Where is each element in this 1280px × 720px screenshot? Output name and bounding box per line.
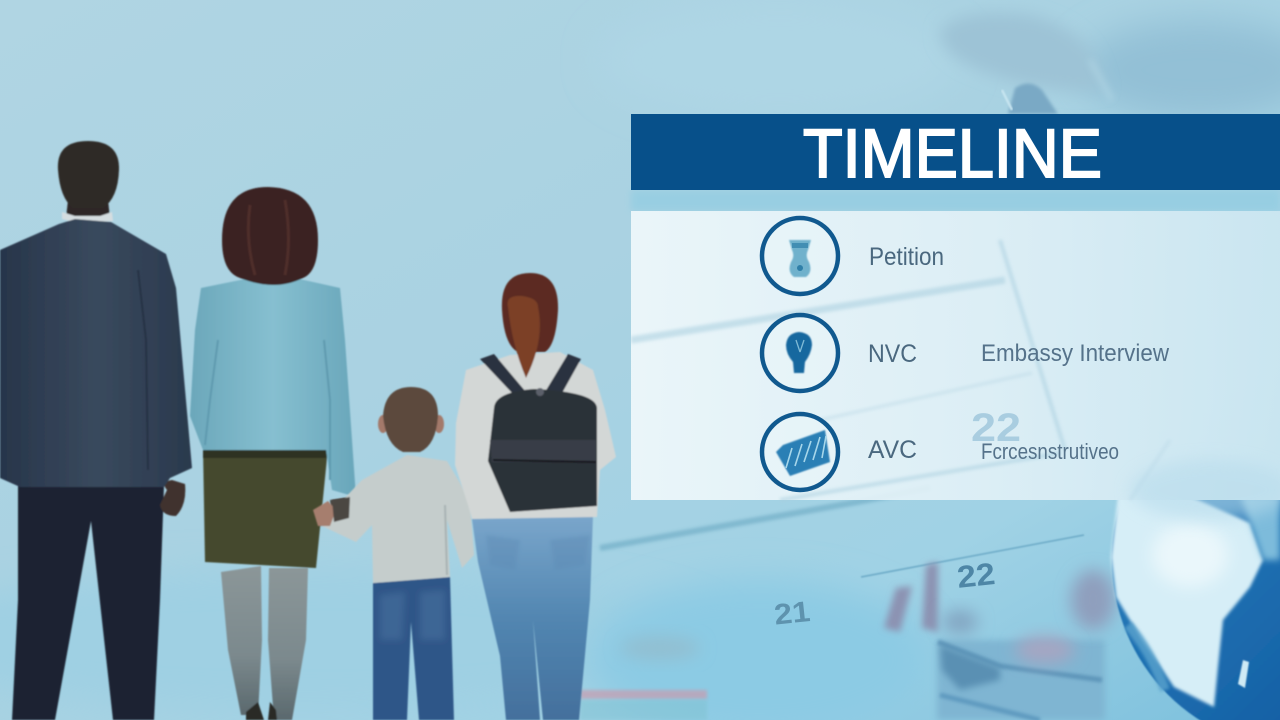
step: Petition (762, 218, 944, 294)
label: AVC: AVC (868, 436, 917, 464)
label: Embassy Interview: Embassy Interview (981, 340, 1170, 367)
calendar ghost lines (631, 240, 1170, 500)
top-right blurred clouds (940, 13, 1280, 120)
icon: emblem (762, 218, 838, 294)
icon: ticket (762, 414, 838, 490)
label: Petition: Petition (869, 243, 944, 271)
date 21: 21 (773, 596, 812, 632)
label: garbled text: Fcrcesnstrutiveo (981, 439, 1119, 464)
label: NVC: NVC (868, 340, 917, 368)
icon: balloon (762, 315, 838, 391)
figure: child (313, 387, 474, 720)
date 22: 22 (955, 556, 997, 595)
figure: girl (455, 273, 616, 720)
title banner (631, 114, 1280, 192)
figure: woman (190, 187, 356, 720)
calendar backdrop (580, 488, 1115, 720)
step: AVC (762, 414, 1119, 490)
panel: timeline steps (631, 211, 1280, 520)
ghost date: 22 (971, 406, 1021, 450)
globe land (1111, 495, 1263, 707)
globe (1110, 500, 1280, 720)
title: TIMELINE (803, 115, 1102, 192)
step: NVC (762, 315, 1170, 391)
figure: man (0, 141, 192, 720)
